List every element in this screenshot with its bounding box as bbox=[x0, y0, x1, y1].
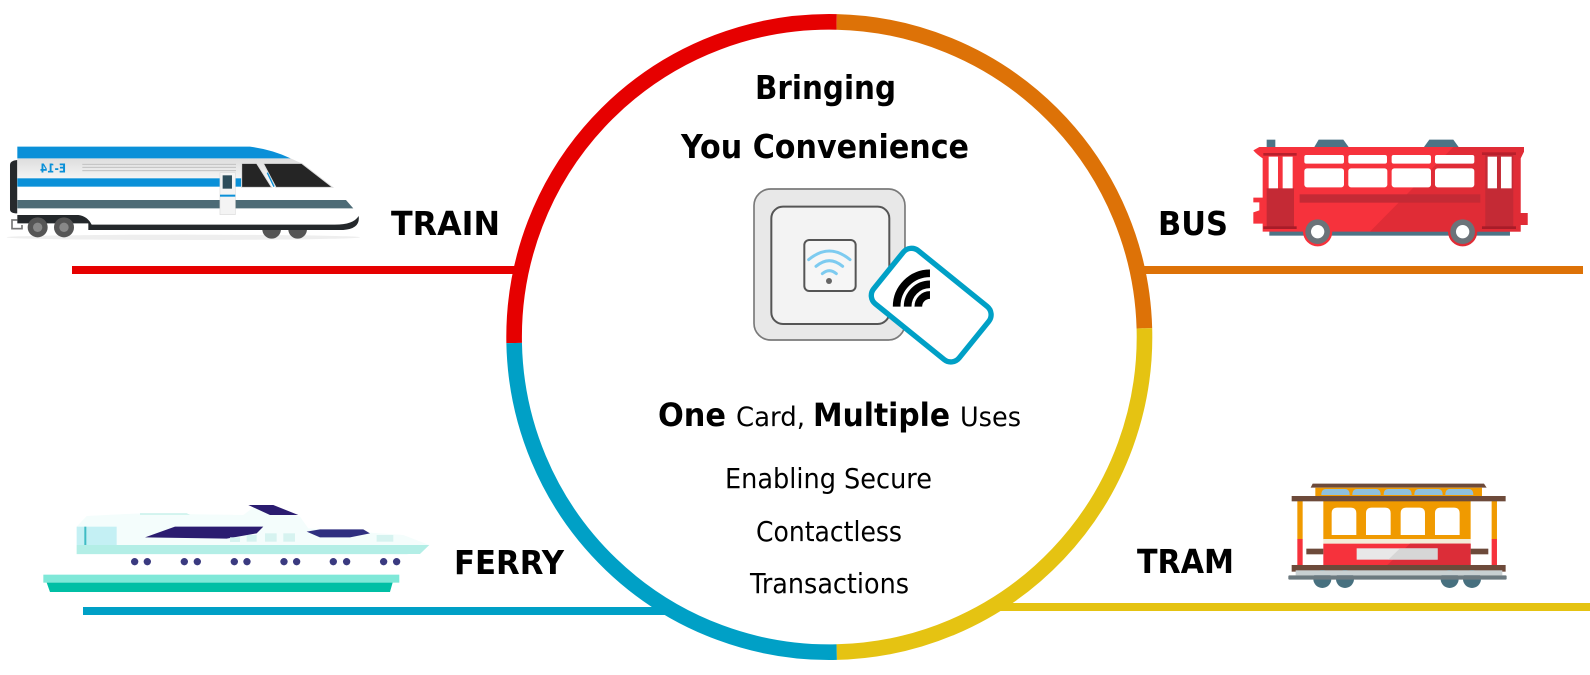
description text bbox=[725, 463, 932, 600]
icon: train: E-14 bbox=[40, 161, 66, 175]
description text: Contactless bbox=[756, 516, 902, 548]
connector line: tram bbox=[998, 603, 1590, 611]
heading: Bringing bbox=[755, 68, 896, 107]
heading bbox=[680, 68, 969, 166]
label: train: TRAIN bbox=[391, 204, 500, 243]
connector line: bus bbox=[1143, 266, 1583, 274]
tagline: Card, bbox=[736, 402, 805, 433]
connector line: ferry bbox=[83, 607, 667, 615]
tagline: One bbox=[658, 396, 726, 434]
heading: You Convenience bbox=[680, 127, 969, 166]
tagline: Uses bbox=[960, 402, 1021, 433]
label: ferry: FERRY bbox=[454, 543, 565, 582]
label: bus: BUS bbox=[1158, 204, 1228, 243]
central ring bbox=[514, 22, 1144, 652]
connector line: train bbox=[72, 266, 516, 274]
description text: Enabling Secure bbox=[725, 463, 932, 495]
icon: bus bbox=[1253, 140, 1528, 246]
icon: card reader with contactless card bbox=[754, 189, 995, 366]
icon: ferry bbox=[43, 505, 429, 592]
label: tram: TRAM bbox=[1137, 542, 1234, 581]
icon: train bbox=[7, 147, 360, 240]
icon: tram bbox=[1288, 484, 1507, 588]
tagline bbox=[658, 396, 1021, 434]
tagline: Multiple bbox=[813, 396, 950, 434]
description text: Transactions bbox=[749, 568, 909, 600]
